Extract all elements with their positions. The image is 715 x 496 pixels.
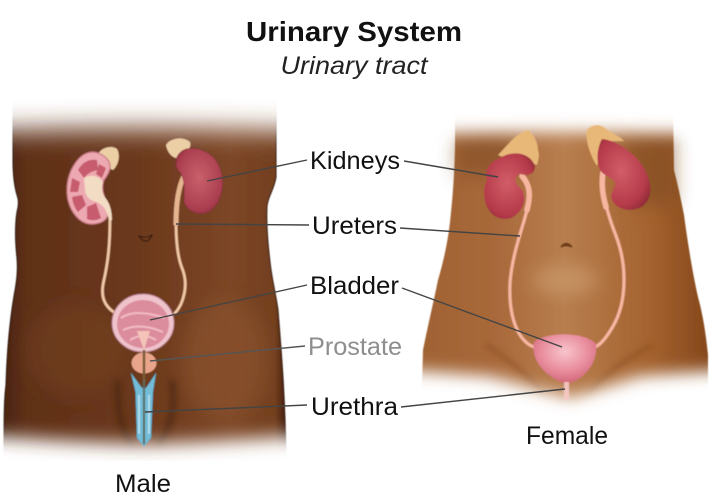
male ureters	[102, 176, 185, 313]
label: Bladder: Bladder	[310, 272, 399, 300]
label: Urethra	[145, 389, 565, 421]
female bladder	[533, 334, 596, 384]
female adrenal glands	[498, 130, 539, 165]
subtitle: Urinary tract	[280, 52, 429, 80]
male prostate	[132, 350, 156, 382]
male bladder	[112, 294, 174, 352]
illustration: male torso	[4, 90, 286, 460]
leader lines: Kidneys	[207, 160, 498, 181]
male kidney: cross-section	[67, 152, 112, 224]
leader lines: Bladder	[150, 285, 562, 347]
male adrenal glands	[97, 147, 119, 170]
male urethra	[131, 373, 156, 446]
label: Kidneys	[207, 147, 498, 181]
label: Ureters	[176, 212, 520, 240]
illustration: female torso	[421, 100, 708, 420]
female kidneys	[484, 153, 535, 219]
leader lines: Ureters	[176, 224, 520, 236]
title: Urinary System	[246, 16, 462, 47]
female body	[421, 100, 708, 420]
label: Kidneys: Kidneys	[310, 147, 400, 175]
male body	[4, 90, 286, 460]
caption: Female: Female	[526, 422, 608, 450]
male kidney: outer	[176, 148, 223, 214]
label: Urethra: Urethra	[311, 393, 398, 421]
navel	[139, 235, 152, 241]
female urethra	[564, 382, 569, 400]
female ureters	[510, 172, 624, 347]
label: Prostate: Prostate	[308, 333, 402, 361]
label: Bladder	[150, 272, 562, 347]
leader lines: Urethra	[145, 389, 565, 412]
label: Prostate	[150, 333, 402, 361]
leader line: Prostate	[150, 346, 305, 361]
female navel	[561, 244, 572, 247]
label: Ureters: Ureters	[312, 212, 397, 240]
